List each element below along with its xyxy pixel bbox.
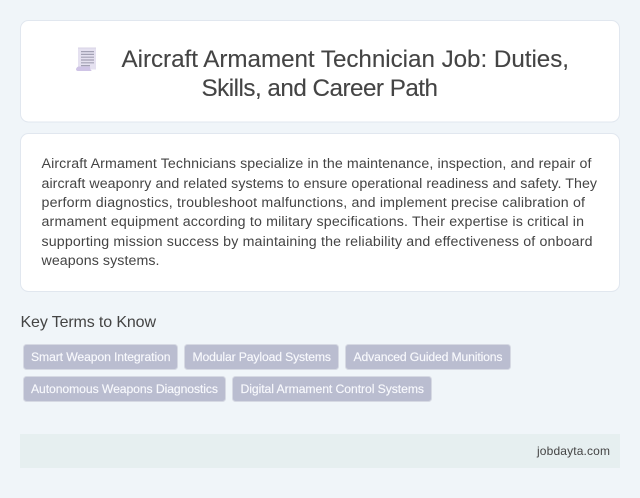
chip: modular payload systems: Modular Payload Systems: [192, 350, 331, 364]
heading: key terms: Key Terms to Know: [20, 314, 156, 331]
chip: smart weapon integration: [24, 344, 178, 370]
chip: digital armament control systems: [232, 376, 432, 402]
description text: Aircraft Armament Technicians specialize in the maintenance, inspection, and repair of: [42, 156, 592, 172]
chip: advanced guided munitions: [346, 344, 510, 370]
description text: aircraft weaponry and related systems to ensure operational readiness and safety. They: [42, 176, 598, 192]
panel: title card: [20, 20, 620, 122]
chip: autonomous weapons diagnostics: [24, 376, 226, 402]
key terms chips: [24, 344, 510, 402]
chip: autonomous weapons diagnostics: Autonomous Weapons Diagnostics: [31, 382, 218, 396]
title: Aircraft Armament Technician Job: Duties,: [122, 46, 569, 73]
chip: modular payload systems: [184, 344, 338, 370]
chip: digital armament control systems: Digital Armament Control Systems: [240, 382, 424, 396]
icon: document scroll: [76, 48, 96, 71]
description text: weapons systems.: [40, 253, 160, 269]
panel: description card: [20, 134, 620, 292]
footer source text: jobdayta.com: [536, 444, 610, 458]
footer bar: [20, 434, 620, 468]
title: Skills, and Career Path: [202, 75, 438, 102]
description text: perform diagnostics, troubleshoot malfunctions, and implement precise calibration of: [42, 195, 585, 211]
description text: [40, 156, 598, 269]
chip: smart weapon integration: Smart Weapon Integration: [31, 350, 170, 364]
description text: armament equipment according to military specifications. Their expertise is critical in: [42, 214, 584, 230]
chip: advanced guided munitions: Advanced Guided Munitions: [354, 350, 502, 364]
description text: supporting mission success by maintaining the reliability and effectiveness of onboard: [42, 234, 592, 250]
title: [122, 46, 569, 102]
